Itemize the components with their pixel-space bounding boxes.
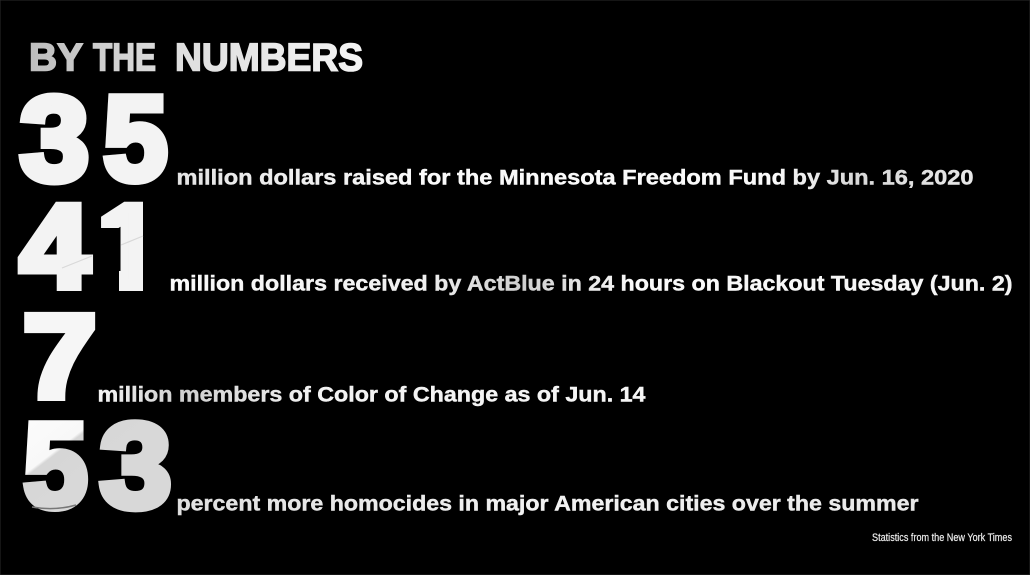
caption 53: percent more homocides in major American cities over the summer — [176, 492, 919, 516]
number 41 — [18, 202, 144, 291]
number 41: 4 — [20, 181, 90, 313]
title: THE — [93, 36, 156, 80]
caption 41: million dollars received by ActBlue in 24 hours on Blackout Tuesday (Jun. 2) — [170, 272, 1013, 296]
number 35 — [20, 72, 168, 206]
statistic: 53 percent — [24, 399, 919, 533]
statistic: 41 million dollars — [20, 181, 1013, 313]
number 7: 7 — [23, 291, 96, 423]
number 53 — [24, 399, 171, 533]
title — [29, 36, 363, 80]
number 53: 5 — [24, 399, 88, 533]
number 53: 3 — [100, 399, 171, 533]
statistic: 35 million dollars — [20, 72, 974, 206]
number 35: 5 — [104, 72, 168, 206]
caption 7: million members of Color of Change as of Jun. 14 — [98, 382, 646, 406]
number 35: 3 — [20, 72, 89, 206]
statistic: 7 million members — [23, 291, 646, 423]
title: NUMBERS — [175, 36, 363, 80]
caption 35: million dollars raised for the Minnesota Freedom Fund by Jun. 16, 2020 — [176, 166, 974, 190]
number 41: 1 — [97, 181, 163, 313]
title: BY — [29, 36, 83, 80]
